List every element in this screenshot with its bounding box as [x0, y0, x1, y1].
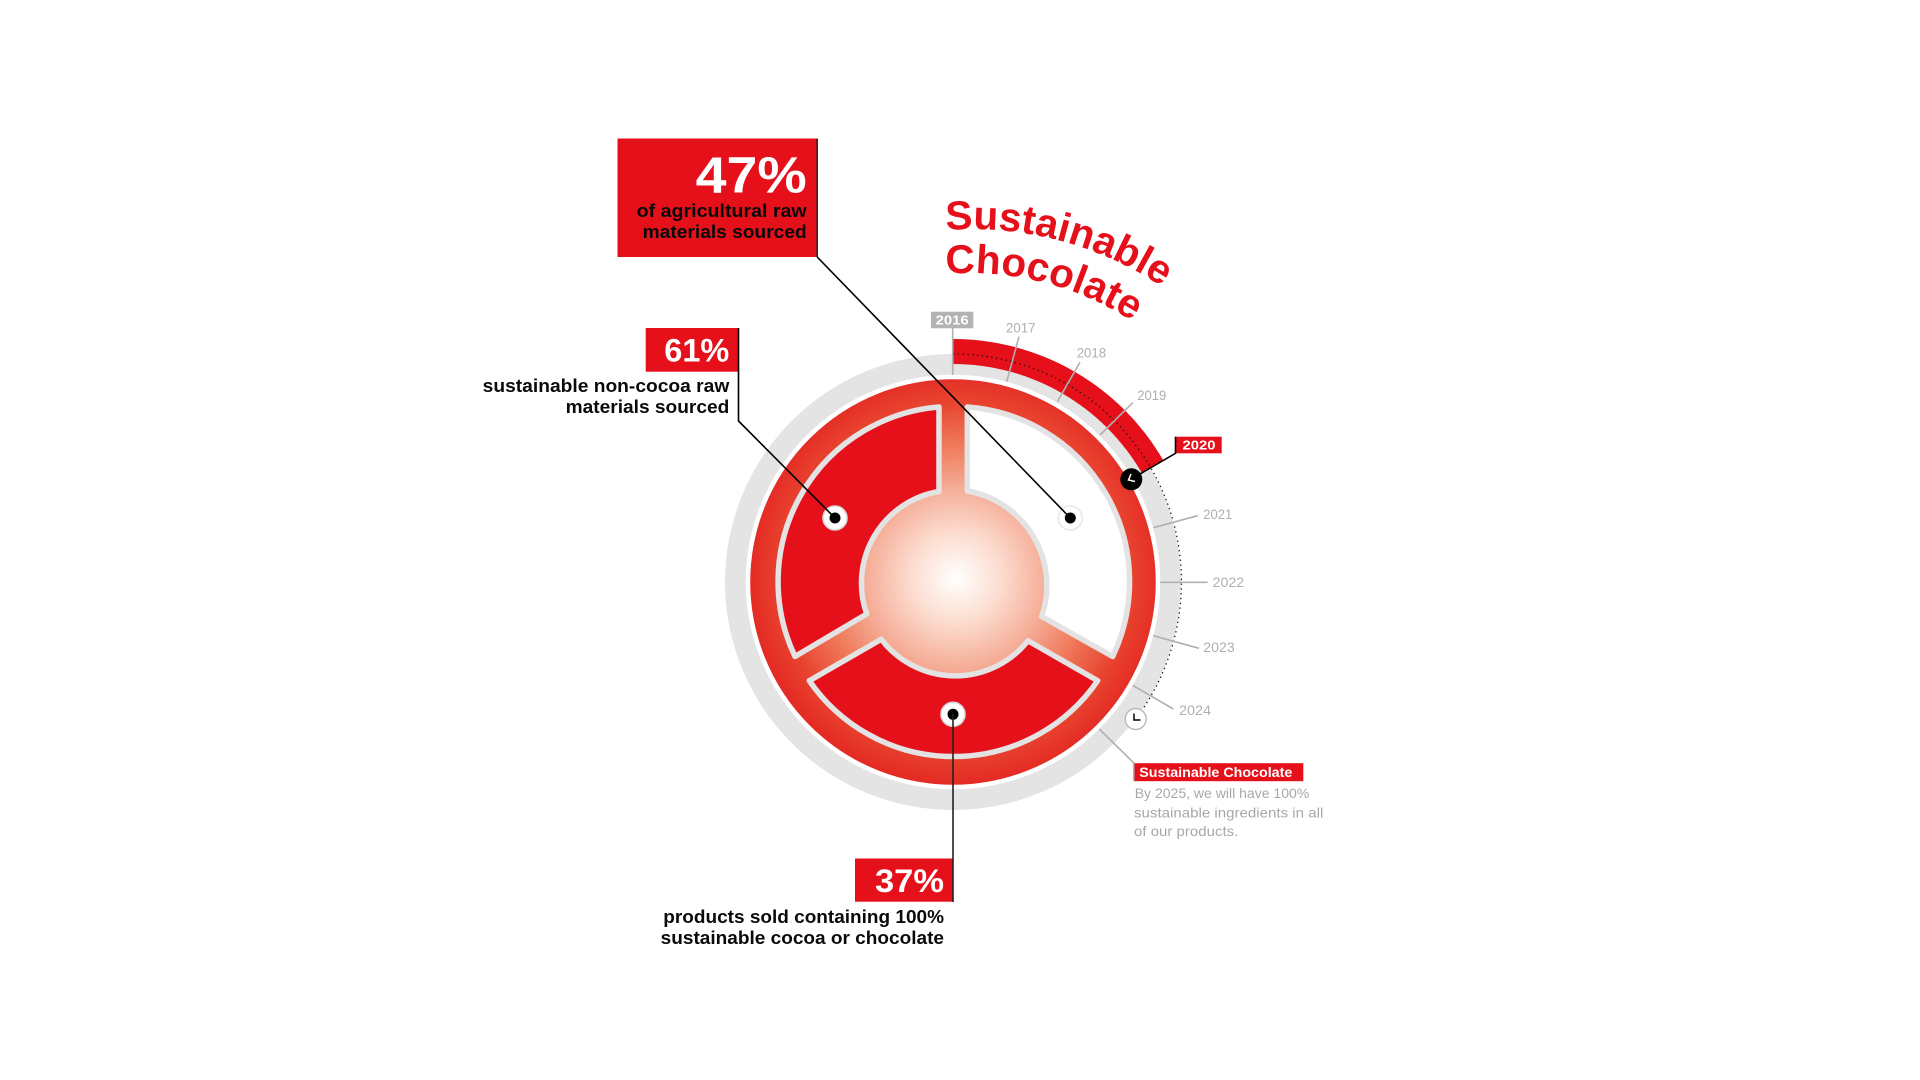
icon: clock current — [1120, 468, 1142, 490]
year 2016: 2016 — [936, 313, 969, 328]
callout: 61 percent: materials sourced — [566, 397, 729, 417]
callout: 61 percent: sustainable non-cocoa raw — [483, 376, 730, 396]
dotted timeline — [953, 354, 1181, 719]
callout: 61 percent: 61% — [664, 333, 729, 369]
goal note: sustainable ingredients in all — [1134, 804, 1323, 820]
year 2020 — [1140, 437, 1222, 474]
marker: 61 percent — [823, 506, 847, 530]
year 2021: 2021 — [1203, 506, 1232, 522]
outer grey ring — [725, 354, 1181, 810]
goal note: By 2025, we will have 100% — [1135, 785, 1309, 801]
segment: 37 percent — [809, 639, 1098, 757]
marker: 47 percent — [1058, 506, 1082, 530]
year 2018 — [1057, 344, 1106, 402]
year 2018: 2018 — [1077, 344, 1106, 360]
callout: 37 percent: 37% — [875, 863, 944, 899]
goal note: of our products. — [1134, 823, 1238, 839]
goal note — [1099, 729, 1323, 839]
gradient disc — [748, 377, 1158, 787]
marker: 37 percent — [941, 702, 965, 726]
callout: 37 percent: sustainable cocoa or chocolate — [661, 928, 944, 948]
year 2022: 2022 — [1213, 574, 1244, 590]
year 2017: 2017 — [1006, 319, 1036, 335]
callout: 61 percent — [483, 328, 835, 518]
goal note: Sustainable Chocolate — [1139, 765, 1293, 780]
year 2017 — [1006, 319, 1036, 382]
callout: 37 percent: products sold containing 100% — [663, 907, 944, 927]
year 2021 — [1153, 506, 1232, 528]
segment: 61 percent — [778, 407, 939, 656]
progress arc 2016 to 2020 — [953, 339, 1163, 473]
callout: 47 percent: of agricultural raw — [637, 201, 808, 221]
callout: 47 percent: materials sourced — [643, 222, 807, 242]
segment: 47 percent — [967, 407, 1130, 656]
year 2024 — [1133, 685, 1211, 718]
callout: 37 percent — [661, 714, 953, 948]
year 2023: 2023 — [1203, 639, 1235, 655]
callout: 47 percent — [618, 138, 1070, 518]
icon: clock target — [1125, 708, 1146, 730]
year 2022 — [1160, 574, 1244, 590]
year 2023 — [1153, 636, 1235, 655]
year 2020: 2020 — [1182, 438, 1216, 453]
year 2019: 2019 — [1137, 387, 1166, 403]
year 2016 — [931, 312, 973, 375]
title: Sustainable — [946, 201, 1169, 283]
title: Chocolate — [947, 244, 1140, 318]
callout: 47 percent: 47% — [696, 146, 807, 204]
year 2024: 2024 — [1179, 702, 1211, 718]
year 2019 — [1100, 387, 1166, 435]
